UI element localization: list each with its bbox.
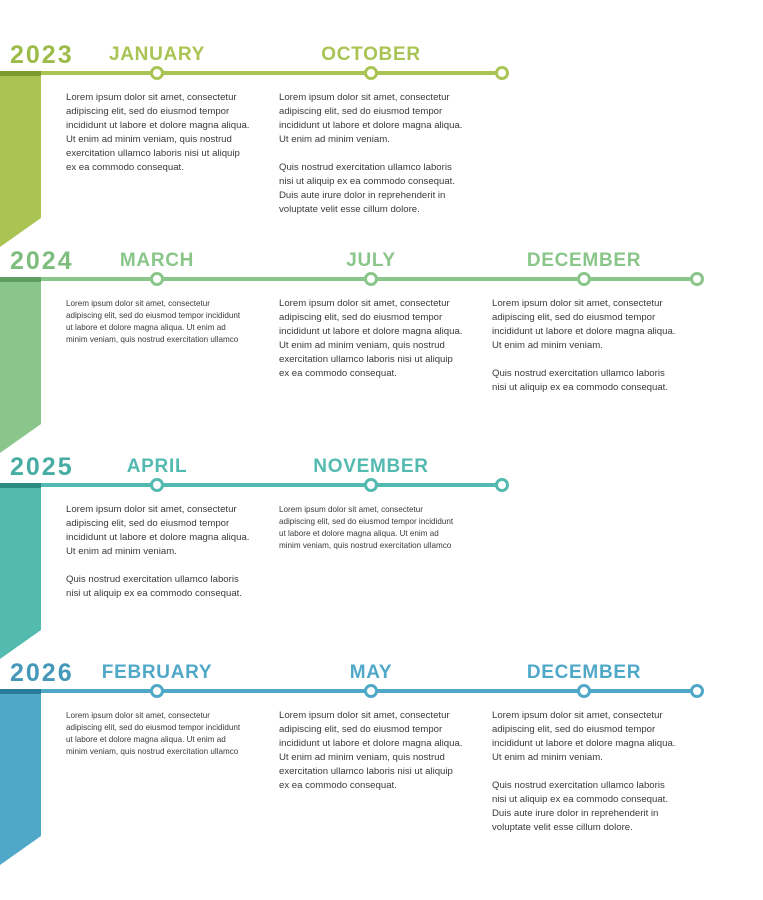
- text 2026 February: Lorem ipsum dolor sit amet, consectetur: [66, 711, 210, 720]
- text 2023 October: Lorem ipsum dolor sit amet, consectetur: [279, 92, 450, 103]
- year 2025: 2025: [10, 453, 74, 481]
- text 2026 May: adipiscing elit, sed do eiusmod tempor: [279, 724, 442, 735]
- text 2024 December: [492, 298, 675, 393]
- text 2026 February: ut labore et dolore magna aliqua. Ut enim ad: [66, 735, 226, 744]
- text 2023 January: adipiscing elit, sed do eiusmod tempor: [66, 106, 229, 117]
- month April: APRIL: [127, 456, 187, 477]
- text 2024 July: exercitation ullamco laboris nisi ut aliquip: [279, 354, 453, 365]
- section 2026 graphics: [0, 686, 702, 865]
- text 2026 December: nisi ut aliquip ex ea commodo consequat.: [492, 794, 668, 805]
- text 2024 March: Lorem ipsum dolor sit amet, consectetur: [66, 299, 210, 308]
- text 2026 December: incididunt ut labore et dolore magna aliqua.: [492, 738, 675, 749]
- text 2025 April: [66, 504, 249, 599]
- text 2023 January: exercitation ullamco laboris nisi ut aliquip: [66, 148, 240, 159]
- text 2023 October: Ut enim ad minim veniam.: [279, 134, 390, 145]
- text 2024 December: incididunt ut labore et dolore magna aliqua.: [492, 326, 675, 337]
- text 2025 April: Ut enim ad minim veniam.: [66, 546, 177, 557]
- text 2024 March: adipiscing elit, sed do eiusmod tempor incididunt: [66, 311, 240, 320]
- text 2023 October: incididunt ut labore et dolore magna aliqua.: [279, 120, 462, 131]
- text 2024 July: adipiscing elit, sed do eiusmod tempor: [279, 312, 442, 323]
- text 2023 October: adipiscing elit, sed do eiusmod tempor: [279, 106, 442, 117]
- text 2023 January: [66, 92, 249, 173]
- text 2024 July: ex ea commodo consequat.: [279, 368, 397, 379]
- text 2026 December: Quis nostrud exercitation ullamco laboris: [492, 780, 665, 791]
- text 2024 March: [66, 299, 240, 344]
- month February: FEBRUARY: [102, 662, 212, 683]
- text 2026 May: Ut enim ad minim veniam, quis nostrud: [279, 752, 445, 763]
- text 2025 November: Lorem ipsum dolor sit amet, consectetur: [279, 505, 423, 514]
- text 2026 February: minim veniam, quis nostrud exercitation ullamco: [66, 747, 238, 756]
- month December 2024: DECEMBER: [527, 250, 641, 271]
- text 2025 November: minim veniam, quis nostrud exercitation ullamco: [279, 541, 451, 550]
- text 2023 October: [279, 92, 462, 215]
- text 2023 October: nisi ut aliquip ex ea commodo consequat.: [279, 176, 455, 187]
- month January: JANUARY: [109, 44, 205, 65]
- text 2024 July: [279, 298, 462, 379]
- text 2023 January: Lorem ipsum dolor sit amet, consectetur: [66, 92, 237, 103]
- text 2026 February: adipiscing elit, sed do eiusmod tempor incididunt: [66, 723, 240, 732]
- text 2026 December: voluptate velit esse cillum dolore.: [492, 822, 633, 833]
- text 2026 December: Ut enim ad minim veniam.: [492, 752, 603, 763]
- text 2025 April: incididunt ut labore et dolore magna aliqua.: [66, 532, 249, 543]
- text 2025 April: Lorem ipsum dolor sit amet, consectetur: [66, 504, 237, 515]
- month March: MARCH: [120, 250, 194, 271]
- text 2024 December: adipiscing elit, sed do eiusmod tempor: [492, 312, 655, 323]
- text 2026 May: exercitation ullamco laboris nisi ut aliquip: [279, 766, 453, 777]
- text 2025 November: ut labore et dolore magna aliqua. Ut enim ad: [279, 529, 439, 538]
- text 2024 December: nisi ut aliquip ex ea commodo consequat.: [492, 382, 668, 393]
- text 2024 July: Ut enim ad minim veniam, quis nostrud: [279, 340, 445, 351]
- text 2024 December: Lorem ipsum dolor sit amet, consectetur: [492, 298, 663, 309]
- text 2023 January: ex ea commodo consequat.: [66, 162, 184, 173]
- text 2023 October: Quis nostrud exercitation ullamco laboris: [279, 162, 452, 173]
- section 2024 graphics: [0, 274, 702, 453]
- year 2023: 2023: [10, 41, 74, 69]
- text 2025 April: nisi ut aliquip ex ea commodo consequat.: [66, 588, 242, 599]
- text 2023 October: voluptate velit esse cillum dolore.: [279, 204, 420, 215]
- text 2026 May: ex ea commodo consequat.: [279, 780, 397, 791]
- text 2026 December: Lorem ipsum dolor sit amet, consectetur: [492, 710, 663, 721]
- text 2026 December: [492, 710, 675, 833]
- text 2026 December: Duis aute irure dolor in reprehenderit in: [492, 808, 658, 819]
- text 2023 October: Duis aute irure dolor in reprehenderit in: [279, 190, 445, 201]
- text 2025 November: [279, 505, 454, 550]
- text 2026 December: adipiscing elit, sed do eiusmod tempor: [492, 724, 655, 735]
- text 2025 April: adipiscing elit, sed do eiusmod tempor: [66, 518, 229, 529]
- text 2024 March: ut labore et dolore magna aliqua. Ut enim ad: [66, 323, 226, 332]
- text 2026 May: [279, 710, 462, 791]
- text 2023 January: incididunt ut labore et dolore magna aliqua.: [66, 120, 249, 131]
- month May: MAY: [350, 662, 392, 683]
- text 2024 December: Ut enim ad minim veniam.: [492, 340, 603, 351]
- month December 2026: DECEMBER: [527, 662, 641, 683]
- month November: NOVEMBER: [313, 456, 429, 477]
- text 2024 July: Lorem ipsum dolor sit amet, consectetur: [279, 298, 450, 309]
- year 2024: 2024: [10, 247, 74, 275]
- text 2025 April: Quis nostrud exercitation ullamco laboris: [66, 574, 239, 585]
- section 2025 graphics: [0, 480, 508, 659]
- text 2024 March: minim veniam, quis nostrud exercitation ullamco: [66, 335, 238, 344]
- text 2023 January: Ut enim ad minim veniam, quis nostrud: [66, 134, 232, 145]
- year 2026: 2026: [10, 659, 74, 687]
- month October: OCTOBER: [321, 44, 421, 65]
- section 2023 graphics: [0, 68, 508, 247]
- month July: JULY: [346, 250, 396, 271]
- text 2026 February: [66, 711, 240, 756]
- text 2025 November: adipiscing elit, sed do eiusmod tempor incididunt: [279, 517, 453, 526]
- text 2026 May: incididunt ut labore et dolore magna aliqua.: [279, 738, 462, 749]
- text 2026 May: Lorem ipsum dolor sit amet, consectetur: [279, 710, 450, 721]
- text 2024 December: Quis nostrud exercitation ullamco laboris: [492, 368, 665, 379]
- text 2024 July: incididunt ut labore et dolore magna aliqua.: [279, 326, 462, 337]
